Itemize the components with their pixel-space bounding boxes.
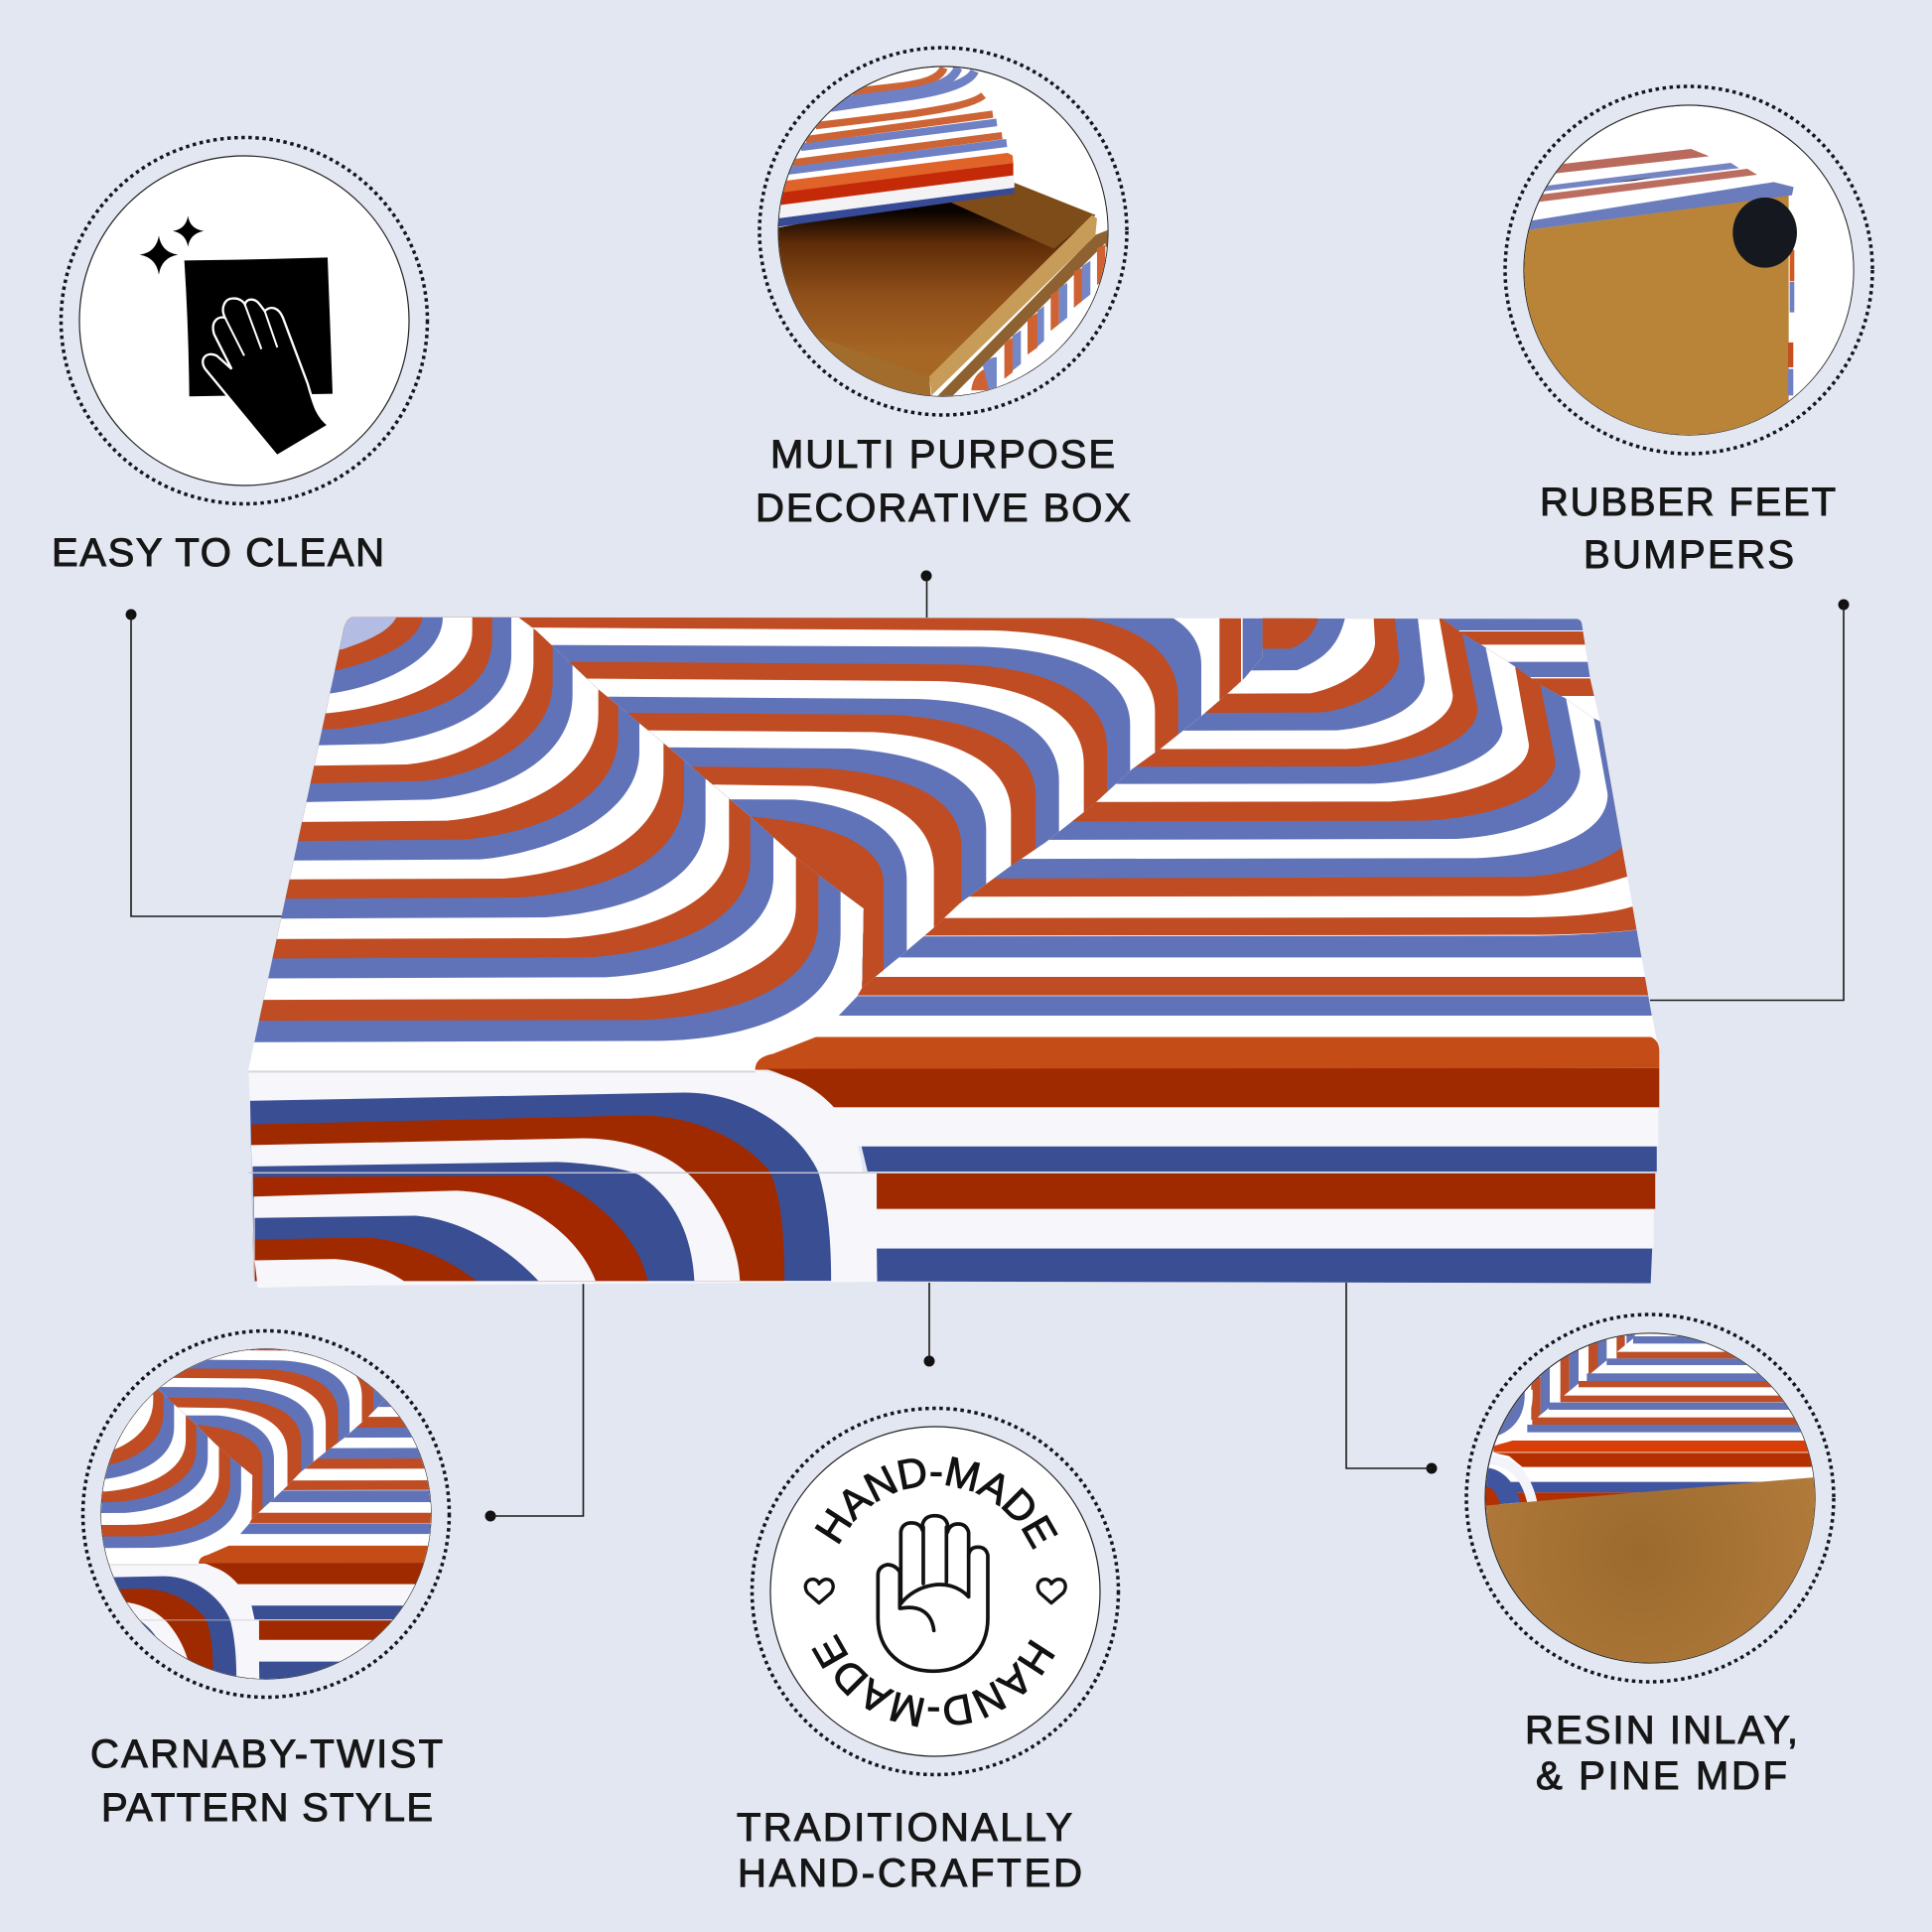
photo: pattern close-up <box>101 1349 431 1679</box>
leader line: resin inlay <box>1346 1283 1438 1473</box>
leader line: easy to clean <box>125 610 282 916</box>
heading: resin inlay and pine mdf <box>1525 1709 1798 1798</box>
leader line: multi purpose <box>921 570 931 618</box>
heading: resin inlay and pine mdf: RESIN INLAY, <box>1525 1709 1798 1752</box>
panel: rubber feet <box>1505 86 1872 454</box>
leader line: hand-crafted <box>923 1283 935 1366</box>
panel: resin inlay <box>1466 1314 1834 1682</box>
heading: traditionally hand-crafted: TRADITIONALLY <box>737 1806 1072 1850</box>
heading: carnaby-twist pattern style: PATTERN STYLE <box>101 1786 433 1830</box>
corner curves <box>1484 1467 1521 1506</box>
heading: traditionally hand-crafted: HAND-CRAFTED <box>738 1852 1082 1895</box>
photo: resin inlay and pine MDF <box>1484 1332 1819 1666</box>
leader line: carnaby-twist <box>484 1283 584 1521</box>
heading: traditionally hand-crafted <box>737 1806 1082 1895</box>
heading: easy to clean: EASY TO CLEAN <box>52 531 384 575</box>
heading: carnaby-twist pattern style <box>90 1732 443 1830</box>
icon: hand-made stamp: HAND-MADE <box>814 1456 1058 1550</box>
heading: resin inlay and pine mdf: & PINE MDF <box>1536 1754 1787 1798</box>
heading: carnaby-twist pattern style: CARNABY-TWIST <box>90 1732 443 1776</box>
panel: multi purpose <box>759 48 1127 415</box>
icon: hand-made stamp: HAND-MADE <box>812 1634 1055 1727</box>
box front lip <box>756 1037 1659 1070</box>
leader line: rubber feet <box>1650 600 1849 1001</box>
lid stripes <box>774 67 1015 218</box>
box front face, curved corner stripes <box>248 1070 1657 1288</box>
icon: hand wiping cloth <box>140 215 333 456</box>
box front face, right stripes <box>765 1068 1659 1283</box>
panel: easy to clean <box>62 137 427 504</box>
heading: rubber feet bumpers: BUMPERS <box>1584 533 1794 577</box>
heading: multi purpose decorative box: DECORATIVE BOX <box>756 486 1131 530</box>
box top face <box>166 583 1721 1112</box>
box front and lip <box>248 1037 1659 1288</box>
heading: rubber feet bumpers <box>1540 481 1836 577</box>
heading: multi purpose decorative box: MULTI PURPOSE <box>770 433 1115 477</box>
panel: hand-crafted badge <box>751 1406 1120 1777</box>
rubber foot <box>1732 198 1797 268</box>
icon: hand-made stamp <box>804 1456 1067 1727</box>
panel: carnaby-twist <box>81 1328 451 1700</box>
photo: box underside with rubber foot <box>1521 102 1859 444</box>
heading: multi purpose decorative box <box>756 433 1131 530</box>
heading: rubber feet bumpers: RUBBER FEET <box>1540 481 1836 524</box>
striped box <box>166 583 1721 1288</box>
photo: open box interior <box>774 63 1115 404</box>
